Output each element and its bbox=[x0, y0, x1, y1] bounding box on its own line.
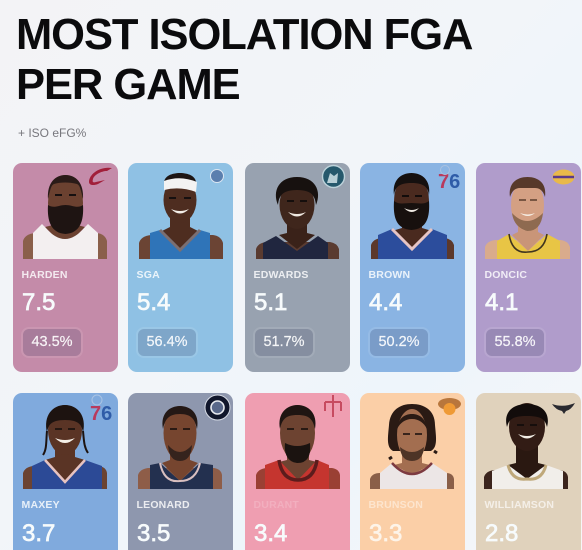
portrait: Brown: 76 bbox=[438, 171, 460, 193]
portrait: Maxey bbox=[23, 394, 112, 489]
portrait: Maxey: 76 bbox=[90, 403, 112, 425]
stat: ISO eFG% bbox=[368, 327, 430, 358]
panel: Brown bbox=[360, 163, 465, 372]
portrait: Durant bbox=[256, 395, 342, 489]
panel: Brunson bbox=[360, 393, 465, 550]
stat: FGA per game: 5.4 bbox=[137, 289, 170, 316]
stat: FGA per game: 4.1 bbox=[485, 289, 518, 316]
panel: SGA bbox=[128, 163, 233, 372]
portrait: Williamson bbox=[484, 403, 575, 489]
stat: FGA per game: 3.5 bbox=[137, 520, 170, 547]
stat: ISO eFG% bbox=[253, 327, 315, 358]
stat: ISO eFG%: 56.4% bbox=[146, 334, 188, 350]
portrait: Harden bbox=[23, 168, 112, 259]
stat: FGA per game: 4.4 bbox=[369, 289, 402, 316]
player name: WILLIAMSON bbox=[484, 499, 554, 511]
stat: FGA per game: 3.7 bbox=[22, 520, 55, 547]
title bbox=[16, 11, 472, 109]
stat: FGA per game: 3.3 bbox=[369, 520, 402, 547]
portrait: Brown bbox=[371, 165, 460, 259]
stat: ISO eFG%: 43.5% bbox=[31, 334, 73, 350]
player name: LEONARD bbox=[136, 499, 190, 511]
stat: ISO eFG%: 55.8% bbox=[494, 334, 536, 350]
stat: ISO eFG% bbox=[21, 327, 83, 358]
stat: FGA per game: 3.4 bbox=[254, 520, 287, 547]
panel: Maxey bbox=[13, 393, 118, 550]
player name: DURANT bbox=[254, 499, 299, 511]
panel: Durant bbox=[245, 393, 350, 550]
stat: ISO eFG% bbox=[136, 327, 198, 358]
title: MOST ISOLATION FGA bbox=[16, 11, 472, 59]
subtitle: + ISO eFG% bbox=[18, 126, 86, 140]
player name: EDWARDS bbox=[254, 269, 309, 281]
stat: ISO eFG%: 51.7% bbox=[263, 334, 305, 350]
panel: Williamson bbox=[476, 393, 581, 550]
panel: Doncic bbox=[476, 163, 581, 372]
portrait: Leonard bbox=[138, 394, 230, 489]
portrait: Brunson bbox=[370, 398, 461, 489]
player name: BRUNSON bbox=[368, 499, 423, 511]
portrait: Doncic bbox=[485, 170, 574, 259]
player name: BROWN bbox=[368, 269, 410, 281]
stat: FGA per game: 5.1 bbox=[254, 289, 287, 316]
panel: Harden bbox=[13, 163, 118, 372]
portrait: SGA bbox=[139, 169, 224, 259]
title: PER GAME bbox=[16, 61, 240, 109]
player name: SGA bbox=[136, 269, 160, 281]
player name: MAXEY bbox=[22, 499, 60, 511]
stat: ISO eFG% bbox=[484, 327, 546, 358]
stat: ISO eFG%: 50.2% bbox=[378, 334, 420, 350]
stat: FGA per game: 2.8 bbox=[485, 520, 518, 547]
player name: HARDEN bbox=[22, 269, 68, 281]
panel: Edwards bbox=[245, 163, 350, 372]
stat: FGA per game: 7.5 bbox=[22, 289, 55, 316]
portrait: Edwards bbox=[256, 164, 346, 259]
panel: Leonard bbox=[128, 393, 233, 550]
player name: DONCIC bbox=[484, 269, 527, 281]
